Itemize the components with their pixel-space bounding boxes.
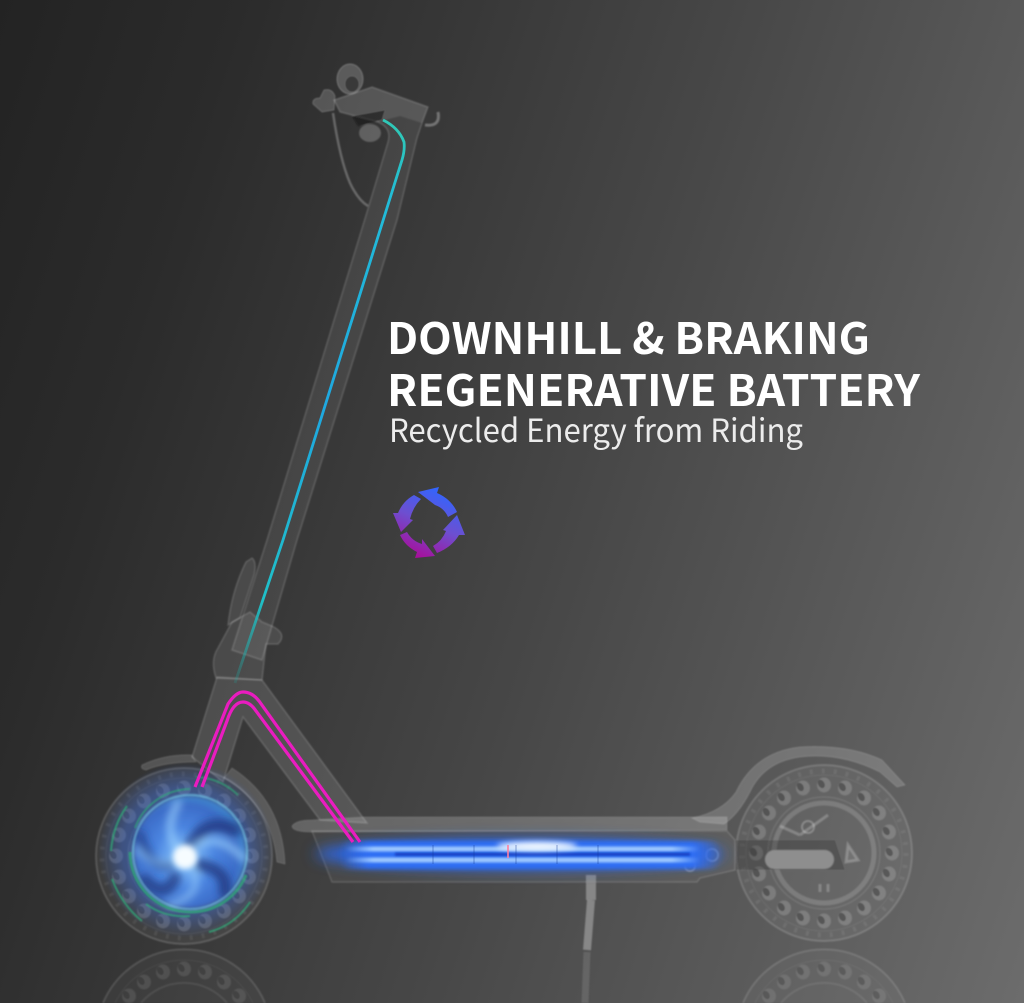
motor spiral glow [98,762,274,938]
subtitle: Recycled Energy from Riding [389,406,803,452]
magenta energy lines [195,692,360,842]
cyan energy line in stem [235,120,404,683]
scooter [96,64,912,1003]
rear dropout pill [765,850,834,869]
deck [292,817,735,882]
front wheel [96,768,272,944]
spiral bright centre [173,845,197,869]
title: REGENERATIVE BATTERY [387,357,921,419]
battery glow [315,839,725,869]
kickstand [585,875,591,1003]
spiral arms [137,803,243,905]
title [387,305,921,419]
icon: recycling arrows [393,487,465,558]
handlebar, head and stem [232,64,438,660]
energy rings [111,777,250,932]
frame fork and down tube [192,677,367,823]
front fender [142,755,285,864]
rear wheel [735,765,912,941]
folding latch and lever [213,558,282,680]
wheel reflections on floor [103,949,905,1003]
rear fender [692,747,905,824]
title: DOWNHILL & BRAKING [387,305,870,367]
